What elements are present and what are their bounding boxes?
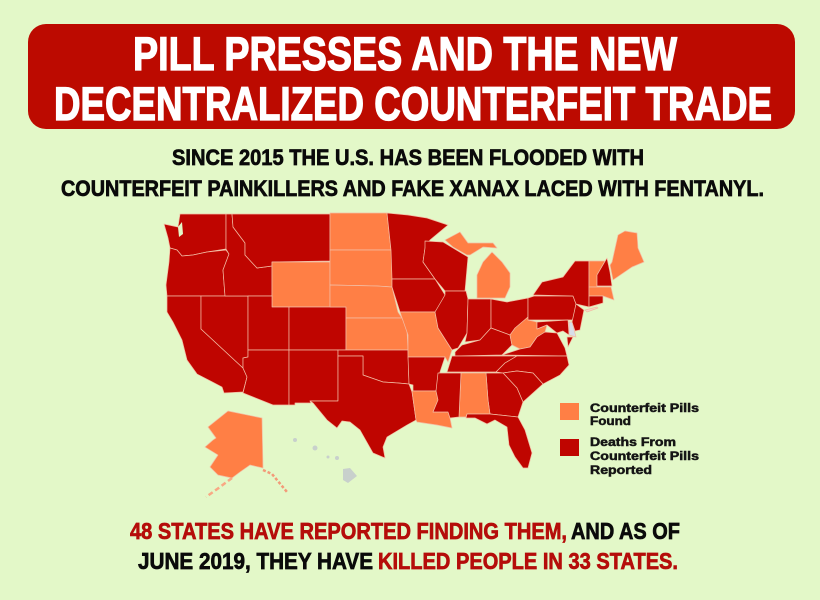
- state: Oregon: [166, 248, 229, 296]
- state: North Carolina: [496, 356, 569, 384]
- state: Long Island: [585, 307, 598, 312]
- bottom statement: JUNE 2019, THEY HAVE: [138, 548, 373, 574]
- subtitle: [61, 145, 764, 201]
- icon: Aleutian islands: [206, 478, 232, 497]
- state: Virginia: [502, 332, 567, 356]
- state: South Dakota: [330, 250, 392, 287]
- state: Wisconsin: [423, 241, 468, 291]
- state: Maryland: [537, 320, 569, 335]
- state: New Jersey: [572, 304, 584, 331]
- icon: Alaska panhandle: [263, 470, 287, 492]
- state: Maine: [610, 231, 644, 280]
- state: New Hampshire: [597, 258, 612, 286]
- state: Hawaii big island: [343, 468, 357, 483]
- legend swatch: deaths: [560, 439, 579, 456]
- state: Vermont: [589, 261, 605, 287]
- state: North Dakota: [330, 213, 391, 250]
- state: Michigan lower: [477, 252, 510, 298]
- map of the United States: [164, 213, 644, 497]
- state: Mississippi: [433, 373, 461, 418]
- state: Hawaii small islands: [293, 438, 339, 460]
- state: Kentucky: [455, 328, 512, 356]
- state: New York: [533, 261, 589, 307]
- state: Michigan upper: [445, 232, 497, 255]
- state: Missouri: [400, 312, 452, 362]
- state: Connecticut: [589, 296, 603, 307]
- subtitle: COUNTERFEIT PAINKILLERS AND FAKE XANAX LACED WITH FENTANYL.: [61, 176, 764, 201]
- state: Montana: [232, 214, 330, 268]
- state: Idaho: [223, 214, 272, 296]
- bottom statement: [130, 518, 680, 574]
- bottom statement: AND AS OF: [571, 518, 680, 544]
- state: Maryland eastern shore: [567, 337, 573, 347]
- state: Iowa: [392, 279, 445, 312]
- subtitle: SINCE 2015 THE U.S. HAS BEEN FLOODED WITH: [172, 145, 644, 170]
- state: Indiana: [465, 299, 491, 342]
- state: Texas: [310, 356, 416, 458]
- state: Minnesota: [387, 213, 448, 279]
- state: Arkansas: [408, 357, 445, 391]
- state: Arizona: [243, 350, 289, 405]
- legend: Counterfeit Pills: [590, 451, 699, 463]
- legend label: found: Counterfeit Pills: [590, 403, 699, 415]
- state: Delaware: [569, 322, 576, 337]
- state: Utah: [248, 296, 289, 350]
- state: Massachusetts: [589, 287, 614, 300]
- legend: Reported: [590, 465, 652, 477]
- state: Alaska: [205, 411, 263, 478]
- state: Tennessee: [447, 356, 517, 372]
- bottom statement: KILLED PEOPLE IN 33 STATES.: [378, 548, 678, 574]
- state: Nebraska: [330, 285, 402, 318]
- legend: [560, 403, 699, 477]
- legend: Found: [590, 416, 631, 428]
- state: West Virginia: [510, 317, 547, 349]
- state: Washington: [164, 214, 226, 256]
- state: Ohio: [491, 298, 528, 335]
- bottom statement: 48 STATES HAVE REPORTED FINDING THEM,: [130, 518, 567, 544]
- state: South Carolina: [503, 371, 543, 402]
- state: Louisiana: [412, 391, 452, 428]
- state: Nevada: [201, 296, 248, 368]
- state: Illinois: [435, 291, 468, 350]
- state: Florida: [466, 414, 532, 468]
- state: Oklahoma: [338, 350, 409, 384]
- legend swatch: found: [560, 403, 579, 420]
- state: Kansas: [346, 318, 408, 350]
- state: Colorado: [289, 307, 346, 350]
- state: New Mexico: [289, 350, 338, 405]
- title banner: [28, 24, 795, 130]
- state: Georgia: [486, 373, 523, 417]
- legend label: deaths: Deaths From: [590, 437, 676, 449]
- state: Pennsylvania: [528, 296, 576, 320]
- state: California: [167, 296, 247, 393]
- state: Wyoming: [272, 262, 330, 307]
- title banner: PILL PRESSES AND THE NEW: [133, 27, 678, 80]
- icon: Puget Sound: [178, 222, 183, 237]
- state: Alabama: [459, 373, 490, 417]
